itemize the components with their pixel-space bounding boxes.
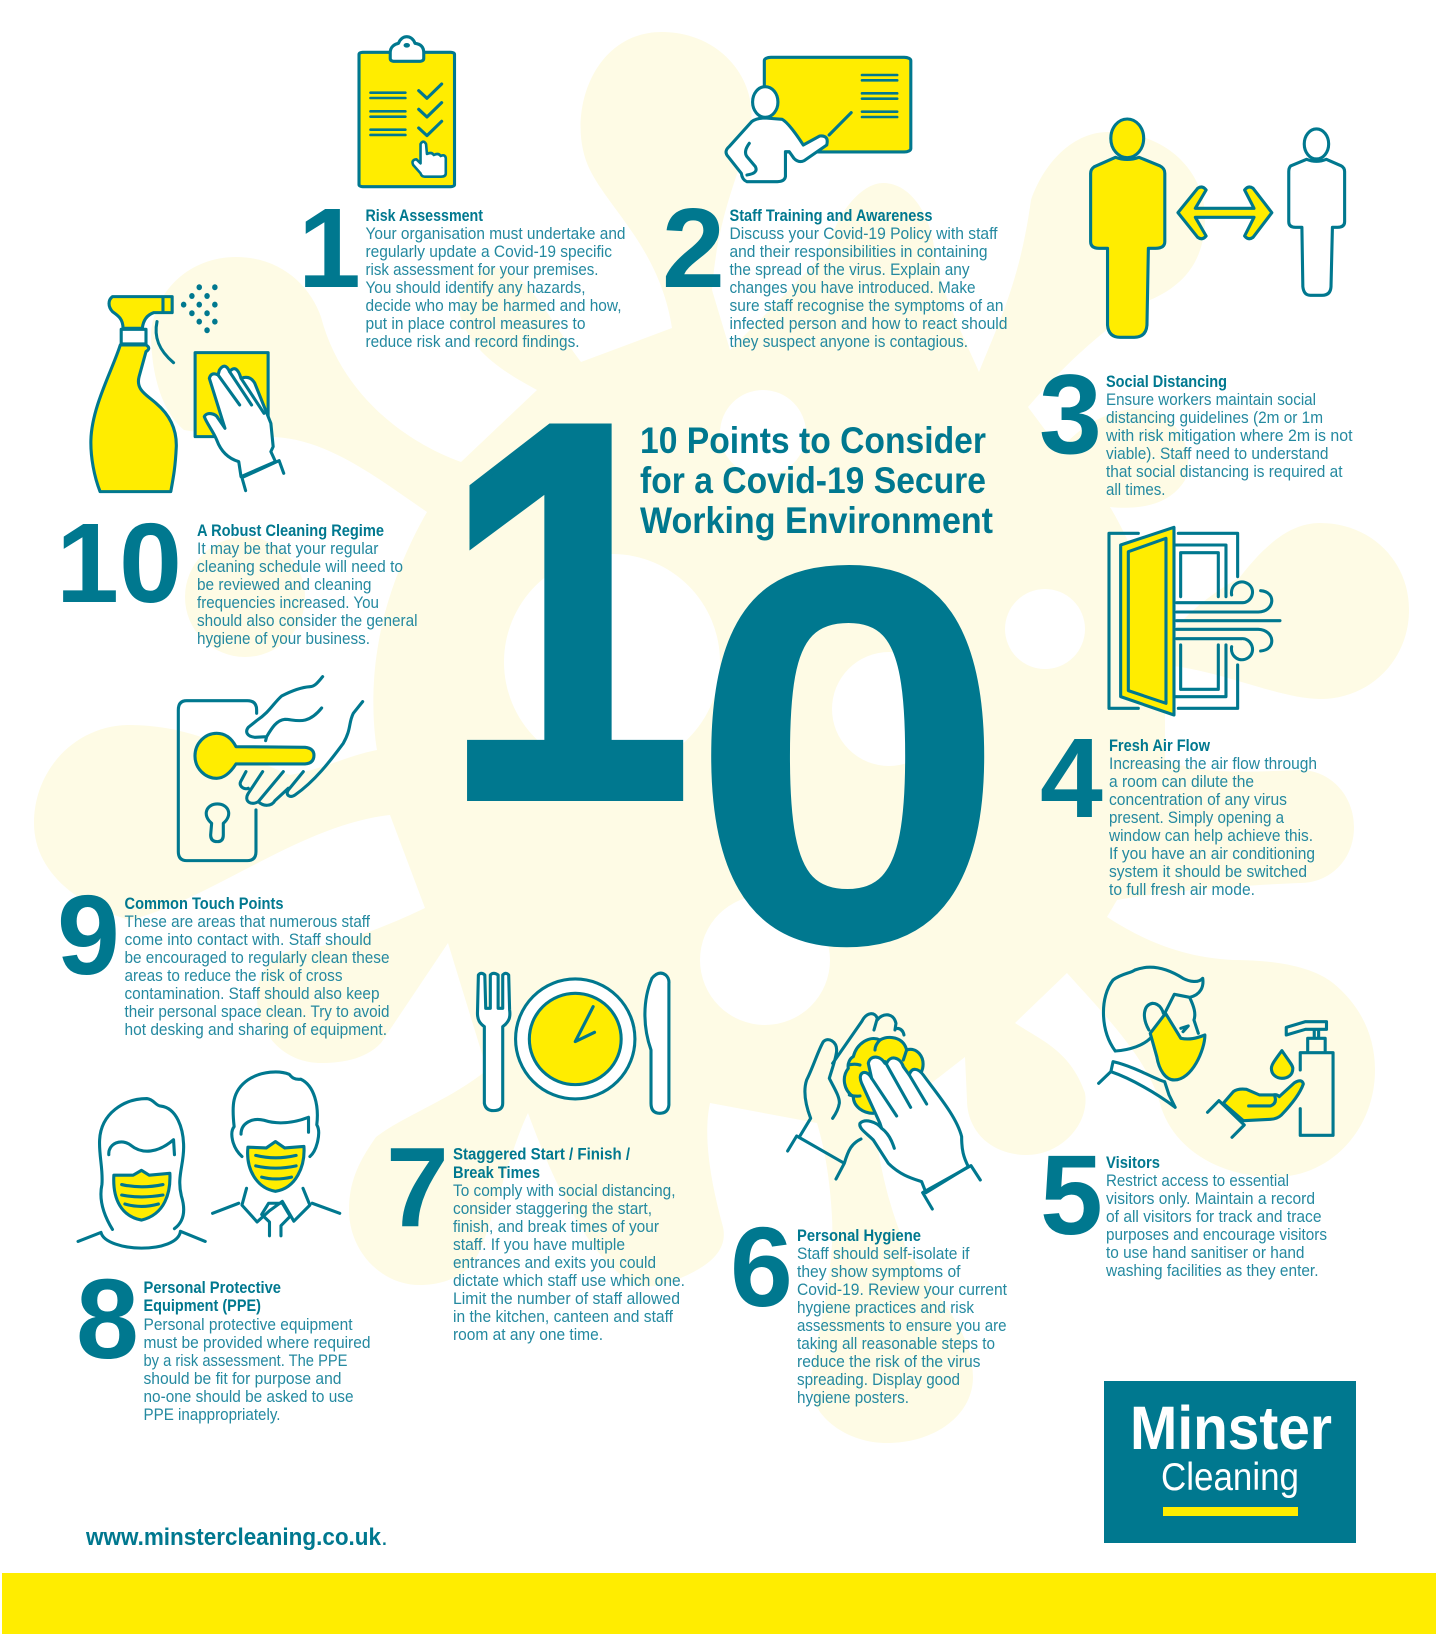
number 2: 2: [662, 185, 725, 311]
body text: Increasing the air flow through: [1109, 755, 1317, 773]
url full stop: .: [381, 1524, 388, 1551]
icon: clipboard checklist: [359, 37, 455, 187]
body text: to use hand sanitiser or hand: [1106, 1244, 1304, 1262]
point 7: staggered times: [386, 973, 685, 1344]
number 10: 10: [56, 500, 182, 626]
logo: Minster Cleaning: [1104, 1381, 1356, 1543]
body text: [453, 1182, 685, 1344]
body text: finish, and break times of your: [453, 1218, 659, 1236]
body text: hygiene of your business.: [197, 630, 370, 648]
body text: of all visitors for track and trace: [1106, 1208, 1322, 1226]
title: for a Covid-19 Secure: [640, 460, 986, 501]
body text: be encouraged to regularly clean these: [124, 949, 390, 967]
number 9: 9: [57, 872, 120, 998]
body text: sure staff recognise the symptoms of an: [730, 297, 1004, 315]
body text: Staff should self-isolate if: [797, 1245, 970, 1263]
point 10: cleaning regime: [56, 284, 418, 648]
body text: Personal protective equipment: [144, 1316, 353, 1334]
body text: Ensure workers maintain social: [1106, 391, 1316, 409]
heading: Break Times: [453, 1164, 540, 1182]
big number 10: 0: [688, 455, 1008, 1057]
body text: be reviewed and cleaning: [197, 576, 372, 594]
point 5: visitors: [1040, 967, 1333, 1280]
body text: hot desking and sharing of equipment.: [124, 1021, 387, 1039]
body text: room at any one time.: [453, 1326, 603, 1344]
body text: [197, 540, 418, 648]
body text: purposes and encourage visitors: [1106, 1226, 1327, 1244]
body text: areas to reduce the risk of cross: [124, 967, 342, 985]
body text: they suspect anyone is contagious.: [730, 333, 968, 351]
heading: Staggered Start / Finish /: [453, 1146, 630, 1164]
body text: by a risk assessment. The PPE: [144, 1352, 348, 1370]
icon: spray bottle and cloth: [91, 284, 284, 492]
number 8: 8: [76, 1256, 139, 1382]
body text: contamination. Staff should also keep: [124, 985, 380, 1003]
body text: no-one should be asked to use: [144, 1388, 354, 1406]
body text: a room can dilute the: [1109, 773, 1254, 791]
heading: Visitors: [1106, 1154, 1160, 1172]
point 8: PPE: [76, 1072, 370, 1424]
body text: washing facilities as they enter.: [1105, 1262, 1318, 1280]
body text: [124, 913, 390, 1039]
body text: that social distancing is required at: [1106, 463, 1343, 481]
point 6: personal hygiene: [730, 1014, 1007, 1407]
icon: hand on door handle: [178, 677, 363, 861]
number 1: 1: [298, 185, 361, 311]
body text: You should identify any hazards,: [366, 279, 586, 297]
number 3: 3: [1039, 351, 1102, 477]
body text: consider staggering the start,: [453, 1200, 652, 1218]
body text: [1105, 1172, 1327, 1280]
body text: their personal space clean. Try to avoid: [124, 1003, 390, 1021]
title: Working Environment: [640, 500, 993, 541]
icon: masked visitor and hand sanitiser: [1099, 967, 1333, 1137]
heading: Social Distancing: [1106, 373, 1227, 391]
point 1: risk assessment: [298, 37, 626, 351]
title: 10 Points to Consider: [640, 420, 986, 461]
heading: [453, 1146, 630, 1182]
point 3: social distancing: [1039, 119, 1353, 499]
body text: To comply with social distancing,: [453, 1182, 676, 1200]
background virus holes: [504, 390, 1085, 1025]
body text: PPE inappropriately.: [144, 1406, 280, 1424]
icon: plate, clock and cutlery: [477, 973, 669, 1113]
body text: and their responsibilities in containing: [730, 243, 988, 261]
body text: changes you have introduced. Make: [730, 279, 976, 297]
title: [640, 420, 993, 541]
heading: Equipment (PPE): [144, 1297, 261, 1315]
body text: cleaning schedule will need to: [197, 558, 403, 576]
body text: to full fresh air mode.: [1109, 881, 1255, 899]
body text: entrances and exits you could: [453, 1254, 656, 1272]
body text: spreading. Display good: [797, 1371, 960, 1389]
body text: [1108, 755, 1317, 899]
body text: come into contact with. Staff should: [124, 931, 372, 949]
number 4: 4: [1040, 715, 1103, 841]
body text: put in place control measures to: [366, 315, 586, 333]
heading: [144, 1279, 281, 1315]
icon: two people apart: [1091, 119, 1345, 337]
body text: visitors only. Maintain a record: [1106, 1190, 1315, 1208]
body text: concentration of any virus: [1109, 791, 1287, 809]
body text: staff. If you have multiple: [453, 1236, 625, 1254]
body text: If you have an air conditioning: [1109, 845, 1315, 863]
body text: window can help achieve this.: [1108, 827, 1313, 845]
body text: These are areas that numerous staff: [124, 913, 370, 931]
body text: reduce risk and record findings.: [366, 333, 580, 351]
number 5: 5: [1040, 1132, 1103, 1258]
body text: frequencies increased. You: [197, 594, 379, 612]
body text: Covid-19. Review your current: [797, 1281, 1007, 1299]
body text: should also consider the general: [197, 612, 418, 630]
body text: It may be that your regular: [197, 540, 379, 558]
logo: Minster Cleaning: Minster: [1130, 1394, 1332, 1462]
body text: in the kitchen, canteen and staff: [453, 1308, 673, 1326]
body text: [797, 1245, 1007, 1407]
body text: Restrict access to essential: [1106, 1172, 1289, 1190]
body text: must be provided where required: [144, 1334, 370, 1352]
heading: Risk Assessment: [366, 207, 483, 225]
point 4: fresh air flow: [1040, 527, 1317, 899]
big number 10: 1: [441, 310, 693, 913]
big number 10: [441, 310, 1008, 1057]
body text: dictate which staff use which one.: [453, 1272, 685, 1290]
icon: open window with air: [1109, 527, 1280, 715]
number 6: 6: [730, 1204, 793, 1330]
body text: all times.: [1106, 481, 1166, 499]
heading: Common Touch Points: [124, 895, 284, 913]
body text: decide who may be harmed and how,: [366, 297, 622, 315]
point 9: common touch points: [57, 677, 390, 1039]
footer band: [2, 1573, 1436, 1634]
icon: presenter at board: [726, 57, 911, 182]
body text: should be fit for purpose and: [144, 1370, 342, 1388]
body text: [730, 225, 1008, 351]
body text: hygiene practices and risk: [797, 1299, 975, 1317]
heading: Personal Hygiene: [797, 1227, 921, 1245]
website url: www.minstercleaning.co.uk: [85, 1524, 381, 1551]
heading: Staff Training and Awareness: [730, 207, 932, 225]
body text: distancing guidelines (2m or 1m: [1106, 409, 1323, 427]
body text: assessments to ensure you are: [797, 1317, 1006, 1335]
body text: they show symptoms of: [797, 1263, 961, 1281]
body text: regularly update a Covid-19 specific: [366, 243, 612, 261]
body text: viable). Staff need to understand: [1106, 445, 1328, 463]
heading: Fresh Air Flow: [1109, 737, 1210, 755]
body text: taking all reasonable steps to: [797, 1335, 995, 1353]
point 2: staff training: [662, 57, 1008, 351]
body text: with risk mitigation where 2m is not: [1105, 427, 1353, 445]
body text: reduce the risk of the virus: [797, 1353, 980, 1371]
body text: Your organisation must undertake and: [366, 225, 626, 243]
body text: system it should be switched: [1109, 863, 1307, 881]
body text: [366, 225, 626, 351]
heading: Personal Protective: [144, 1279, 281, 1297]
body text: present. Simply opening a: [1109, 809, 1285, 827]
body text: the spread of the virus. Explain any: [730, 261, 970, 279]
body text: [1105, 391, 1353, 499]
body text: risk assessment for your premises.: [366, 261, 598, 279]
body text: infected person and how to react should: [730, 315, 1008, 333]
body text: Limit the number of staff allowed: [453, 1290, 680, 1308]
body text: [144, 1316, 370, 1424]
heading: A Robust Cleaning Regime: [197, 522, 384, 540]
icon: washing hands with soap: [788, 1014, 980, 1209]
logo: Minster Cleaning: Cleaning: [1161, 1456, 1299, 1499]
body text: hygiene posters.: [797, 1389, 909, 1407]
body text: Discuss your Covid-19 Policy with staff: [730, 225, 998, 243]
number 7: 7: [386, 1124, 449, 1250]
icon: two people wearing masks: [78, 1072, 340, 1248]
